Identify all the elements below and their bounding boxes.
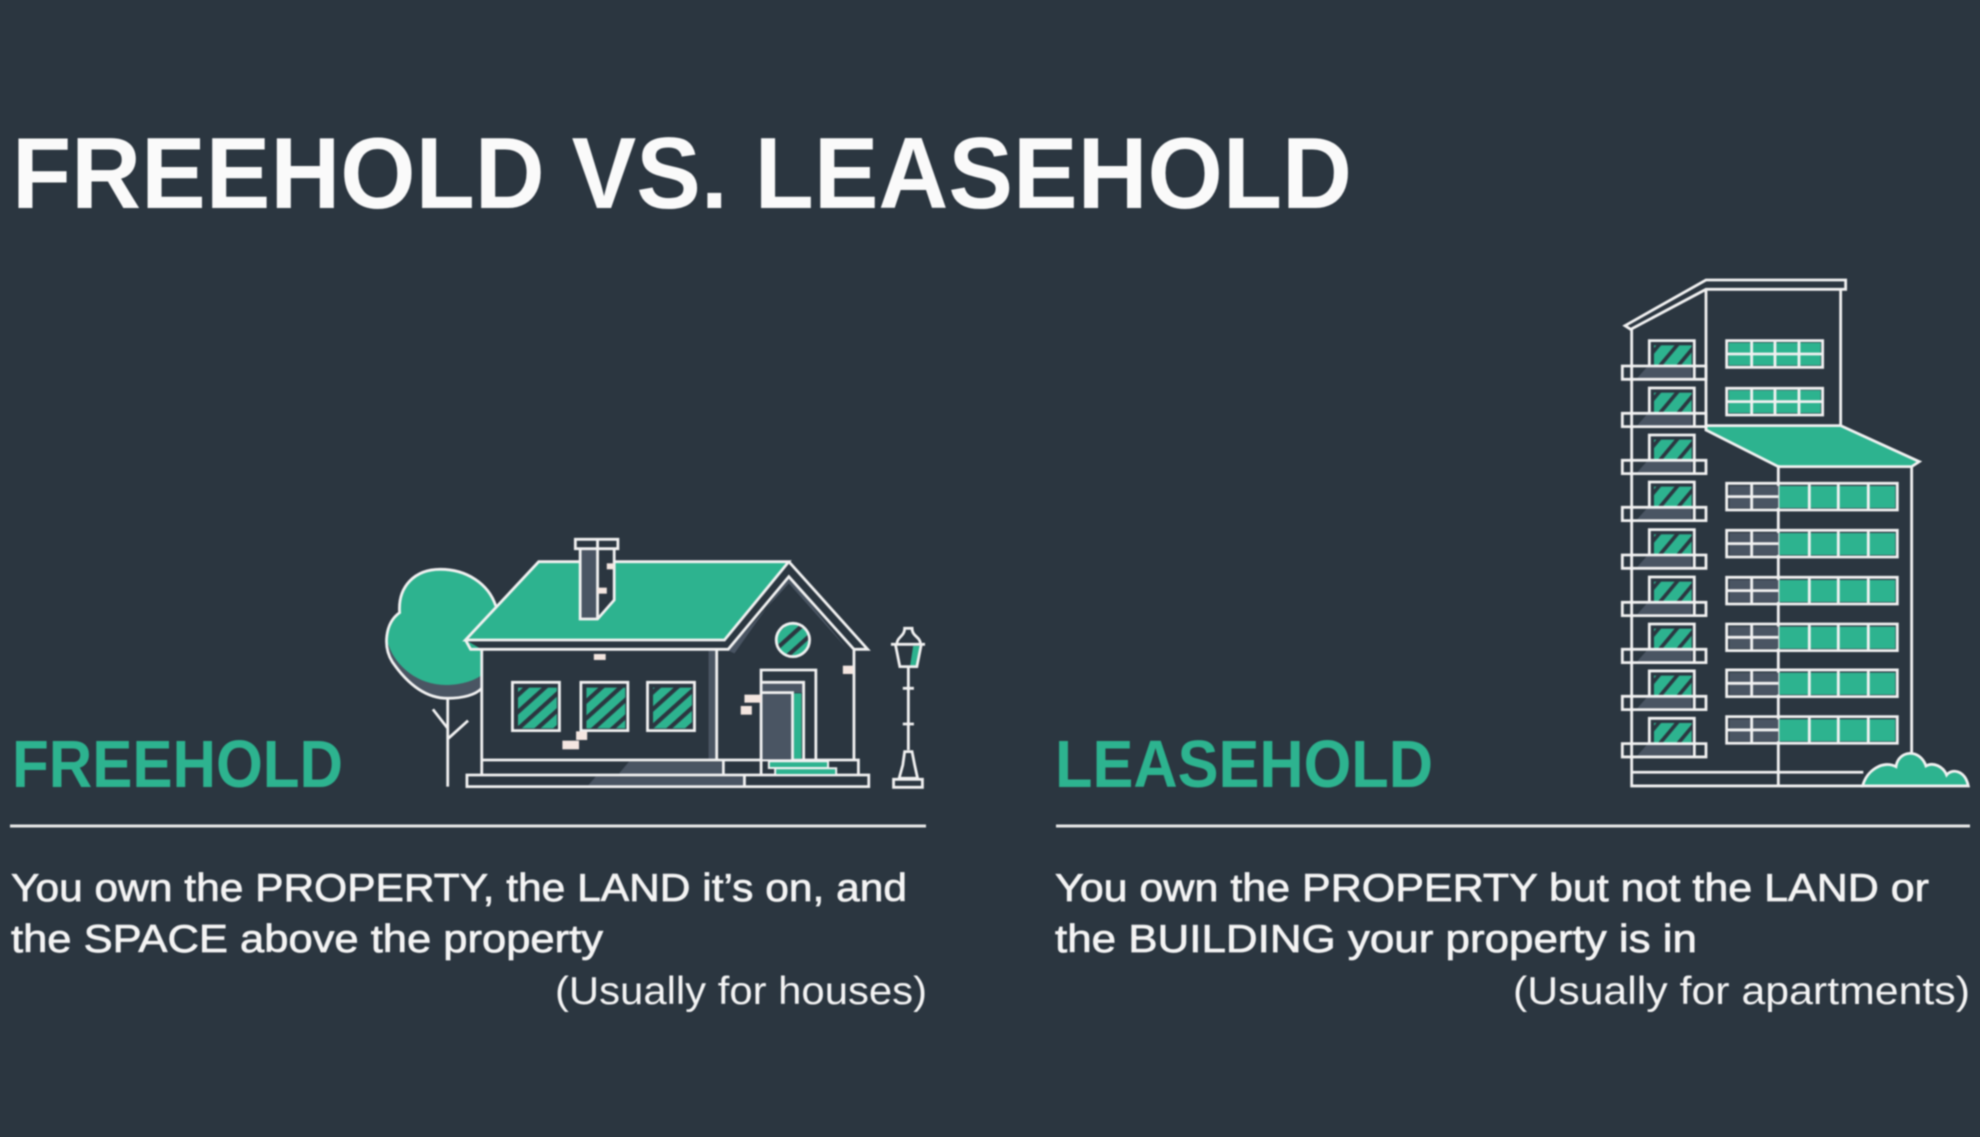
heading: freehold: FREEHOLD — [12, 727, 343, 802]
text: freehold description — [11, 867, 927, 1013]
lower windows — [1727, 483, 1897, 743]
divider — [1056, 824, 1970, 828]
building walls — [1632, 289, 1912, 786]
icon: house — [465, 539, 869, 787]
chimney — [575, 539, 618, 619]
text: freehold description: the SPACE above the property — [11, 918, 604, 961]
icon: tree — [386, 569, 496, 787]
upper windows — [1727, 341, 1823, 415]
heading: leasehold: LEASEHOLD — [1055, 727, 1433, 802]
illustration: apartment building — [1622, 280, 1968, 786]
text: freehold description: (Usually for houses) — [555, 970, 927, 1013]
bricks — [562, 654, 853, 749]
balconies — [1622, 341, 1706, 757]
panel: freehold — [10, 539, 927, 1013]
panel: leasehold — [1055, 280, 1970, 1013]
text: leasehold description: You own the PROPERTY but not the LAND or — [1055, 867, 1929, 910]
text: leasehold description: (Usually for apartments) — [1513, 970, 1970, 1013]
title: FREEHOLD VS. LEASEHOLD — [12, 118, 1352, 230]
roofs — [1625, 280, 1919, 467]
divider — [10, 824, 926, 828]
door — [761, 670, 836, 775]
icon: bush — [1863, 753, 1968, 786]
text: leasehold description: the BUILDING your property is in — [1055, 918, 1697, 961]
icon: street lamp — [891, 628, 925, 787]
round window — [776, 623, 810, 657]
illustration: house with tree and lamp — [386, 539, 925, 787]
windows — [512, 682, 694, 731]
text: leasehold description — [1055, 867, 1970, 1013]
text: freehold description: You own the PROPERTY, the LAND it’s on, and — [11, 867, 907, 910]
